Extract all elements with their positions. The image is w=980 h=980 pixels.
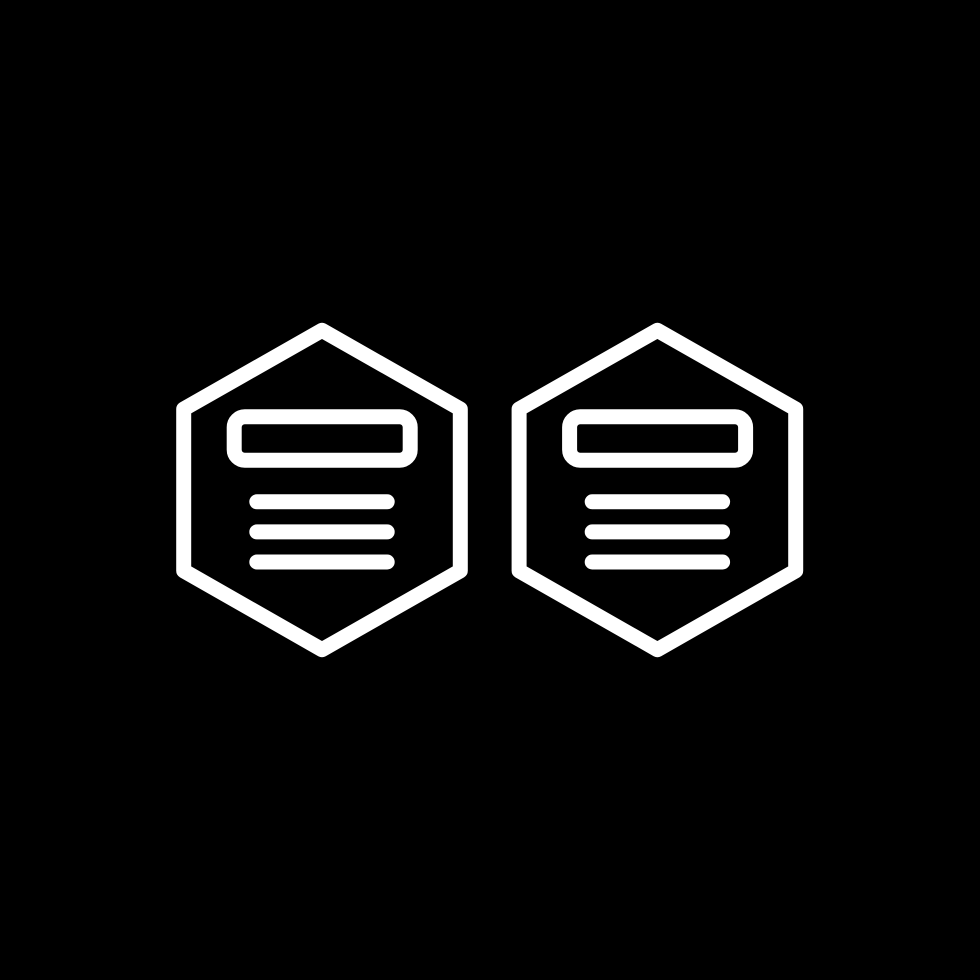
icon: right hexagon — [519, 330, 796, 650]
icon: left hexagon — [184, 330, 460, 650]
